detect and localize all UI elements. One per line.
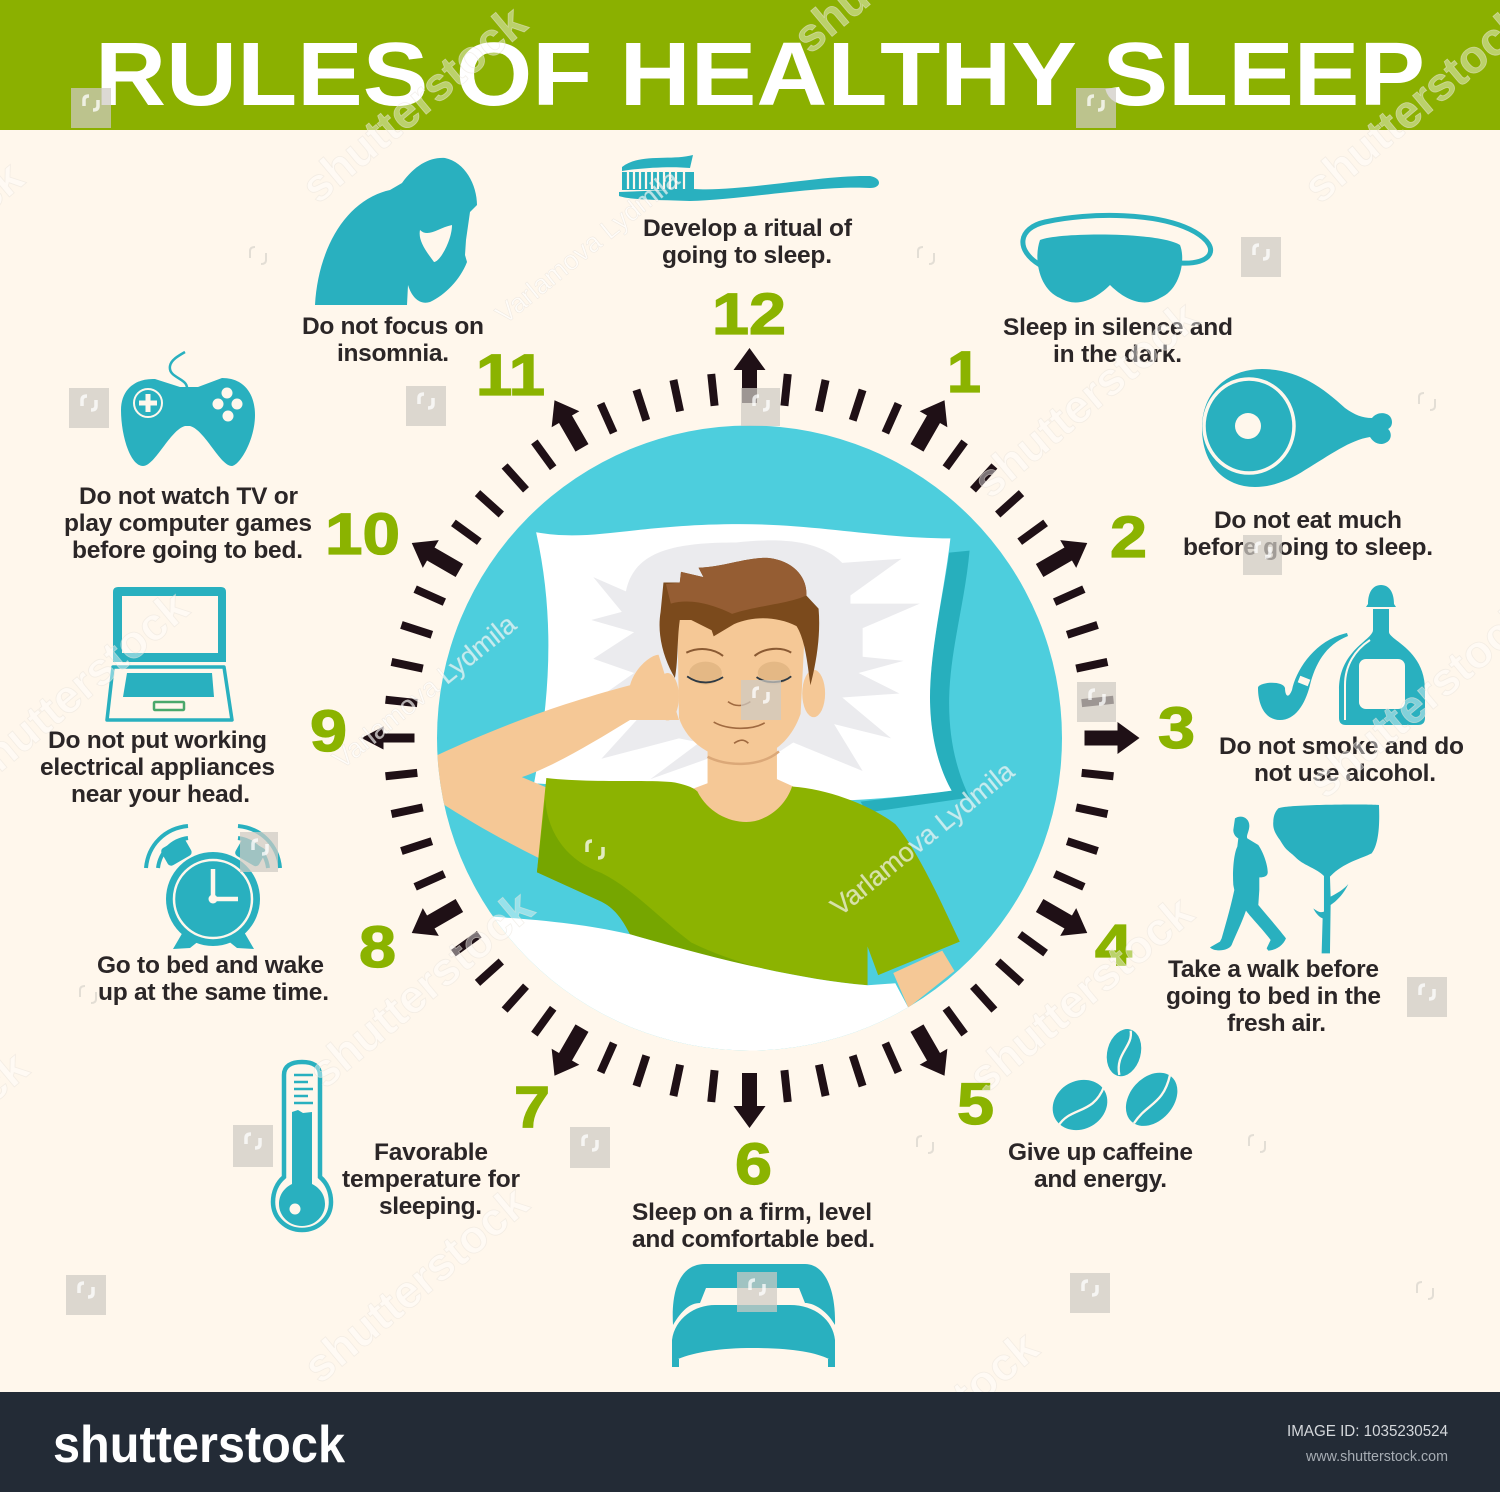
footer bar bbox=[0, 1392, 1500, 1492]
rule 10: tv and games bbox=[64, 352, 400, 567]
icon: alarm clock bbox=[146, 826, 280, 949]
neck bbox=[694, 748, 793, 822]
text: up at the same time. bbox=[98, 979, 329, 1006]
watermarks: shutterstock bbox=[958, 885, 1203, 1103]
watermarks: Varlamova Lydmila bbox=[825, 755, 1021, 922]
pillow bbox=[534, 524, 952, 801]
text: going to bed in the bbox=[1166, 983, 1381, 1010]
text bbox=[64, 483, 312, 564]
eyes and brows bbox=[687, 676, 791, 682]
rule 6: firm bed bbox=[632, 1132, 875, 1367]
shirt bbox=[537, 778, 960, 985]
arm bbox=[430, 655, 679, 859]
hair highlight bbox=[666, 558, 806, 614]
text: Give up caffeine bbox=[1008, 1139, 1193, 1166]
watermarks: shutterstock bbox=[963, 290, 1208, 508]
number 9: 9 bbox=[310, 699, 347, 764]
text: sleeping. bbox=[379, 1193, 482, 1220]
text bbox=[1219, 733, 1464, 787]
title: RULES OF HEALTHY SLEEP bbox=[95, 25, 1425, 125]
text: play computer games bbox=[64, 510, 312, 537]
number 8: 8 bbox=[359, 915, 396, 980]
rule 1: silence and dark bbox=[947, 215, 1233, 405]
icon: pipe and bottle bbox=[1258, 585, 1425, 725]
text: and comfortable bed. bbox=[632, 1226, 875, 1253]
icon: laptop bbox=[107, 587, 232, 720]
text: before going to bed. bbox=[72, 537, 303, 564]
text: insomnia. bbox=[337, 340, 449, 367]
number 10: 10 bbox=[325, 502, 400, 567]
hour arrows bbox=[362, 348, 1140, 1128]
text: near your head. bbox=[71, 781, 250, 808]
text bbox=[302, 313, 484, 367]
watermark squares bbox=[66, 88, 1447, 1315]
icon: walker and tree bbox=[1210, 804, 1379, 953]
icon: ham bbox=[1202, 369, 1392, 487]
text: Favorable bbox=[374, 1139, 488, 1166]
icon: toothbrush bbox=[619, 155, 879, 201]
title banner bbox=[0, 0, 1500, 130]
text: temperature for bbox=[342, 1166, 520, 1193]
rule 12: ritual bbox=[619, 155, 879, 347]
text bbox=[643, 215, 853, 269]
watermarks: shutterstock bbox=[293, 1175, 538, 1393]
text: in the dark. bbox=[1053, 341, 1182, 368]
rule 2: do not eat much bbox=[1110, 369, 1433, 570]
text: Take a walk before bbox=[1168, 956, 1379, 983]
blanket bbox=[494, 916, 908, 1050]
icon: sleep mask bbox=[1023, 215, 1211, 302]
icon: coffee beans bbox=[1043, 1025, 1188, 1140]
clock dial with ticks bbox=[362, 348, 1140, 1128]
text: Do not watch TV or bbox=[79, 483, 298, 510]
watermarks: Varlamova Lydmila bbox=[327, 608, 523, 775]
rule 7: temperature bbox=[273, 1062, 550, 1230]
number 12: 12 bbox=[712, 282, 786, 347]
central circle with sleeping man bbox=[430, 426, 1062, 1063]
rule 9: appliances bbox=[40, 587, 347, 808]
text: and energy. bbox=[1034, 1166, 1167, 1193]
watermarks: Varlamova Lydmila bbox=[490, 163, 686, 330]
text: Do not put working bbox=[48, 727, 267, 754]
text bbox=[342, 1139, 520, 1220]
number 2: 2 bbox=[1110, 505, 1147, 570]
number 7: 7 bbox=[514, 1075, 550, 1140]
text bbox=[1166, 956, 1381, 1037]
icon: thermometer bbox=[273, 1062, 331, 1230]
neck shadow bbox=[708, 751, 779, 764]
watermarks: shutterstock bbox=[291, 0, 536, 213]
text: Sleep on a firm, level bbox=[632, 1199, 872, 1226]
icon: person with head in hand bbox=[315, 158, 477, 305]
face bbox=[677, 616, 806, 760]
text bbox=[1008, 1139, 1193, 1193]
text bbox=[632, 1199, 875, 1253]
website: www.shutterstock.com bbox=[1305, 1449, 1448, 1465]
icon: bed bbox=[672, 1264, 835, 1367]
text: before going to sleep. bbox=[1183, 534, 1433, 561]
text: Do not smoke and do bbox=[1219, 733, 1464, 760]
ears bbox=[664, 673, 679, 720]
text: Sleep in silence and bbox=[1003, 314, 1233, 341]
text: Do not eat much bbox=[1214, 507, 1402, 534]
rule 5: caffeine bbox=[957, 1025, 1193, 1193]
number 1: 1 bbox=[947, 340, 981, 405]
image id: IMAGE ID: 1035230524 bbox=[1287, 1423, 1448, 1440]
text bbox=[40, 727, 275, 808]
pillow side shadow bbox=[861, 551, 970, 813]
text: Go to bed and wake bbox=[97, 952, 324, 979]
rule 3: smoking and alcohol bbox=[1158, 585, 1464, 787]
number 5: 5 bbox=[957, 1072, 994, 1137]
hair bbox=[660, 558, 819, 685]
lower arm bbox=[893, 951, 954, 1008]
footer logo: shutterstock bbox=[53, 1416, 345, 1474]
number 6: 6 bbox=[735, 1132, 772, 1197]
icon: game controller bbox=[121, 352, 255, 466]
nose and mouth bbox=[714, 702, 765, 743]
rule 8: same time bbox=[97, 826, 396, 1006]
eyelids bbox=[689, 662, 722, 684]
text: not use alcohol. bbox=[1254, 760, 1436, 787]
text bbox=[97, 952, 329, 1006]
rule 4: walk in fresh air bbox=[1095, 804, 1381, 1037]
text: Develop a ritual of bbox=[643, 215, 853, 242]
rule 11: insomnia bbox=[302, 158, 545, 408]
watermarks: shutterstock bbox=[298, 880, 543, 1098]
text bbox=[1183, 507, 1433, 561]
number 3: 3 bbox=[1158, 696, 1195, 761]
text: fresh air. bbox=[1227, 1010, 1326, 1037]
number 4: 4 bbox=[1095, 913, 1132, 978]
shirt shadow bbox=[536, 800, 760, 968]
text: Do not focus on bbox=[302, 313, 484, 340]
text: electrical appliances bbox=[40, 754, 275, 781]
number 11: 11 bbox=[476, 343, 545, 408]
text bbox=[1003, 314, 1233, 368]
text: going to sleep. bbox=[662, 242, 832, 269]
pillow creases bbox=[591, 540, 920, 779]
